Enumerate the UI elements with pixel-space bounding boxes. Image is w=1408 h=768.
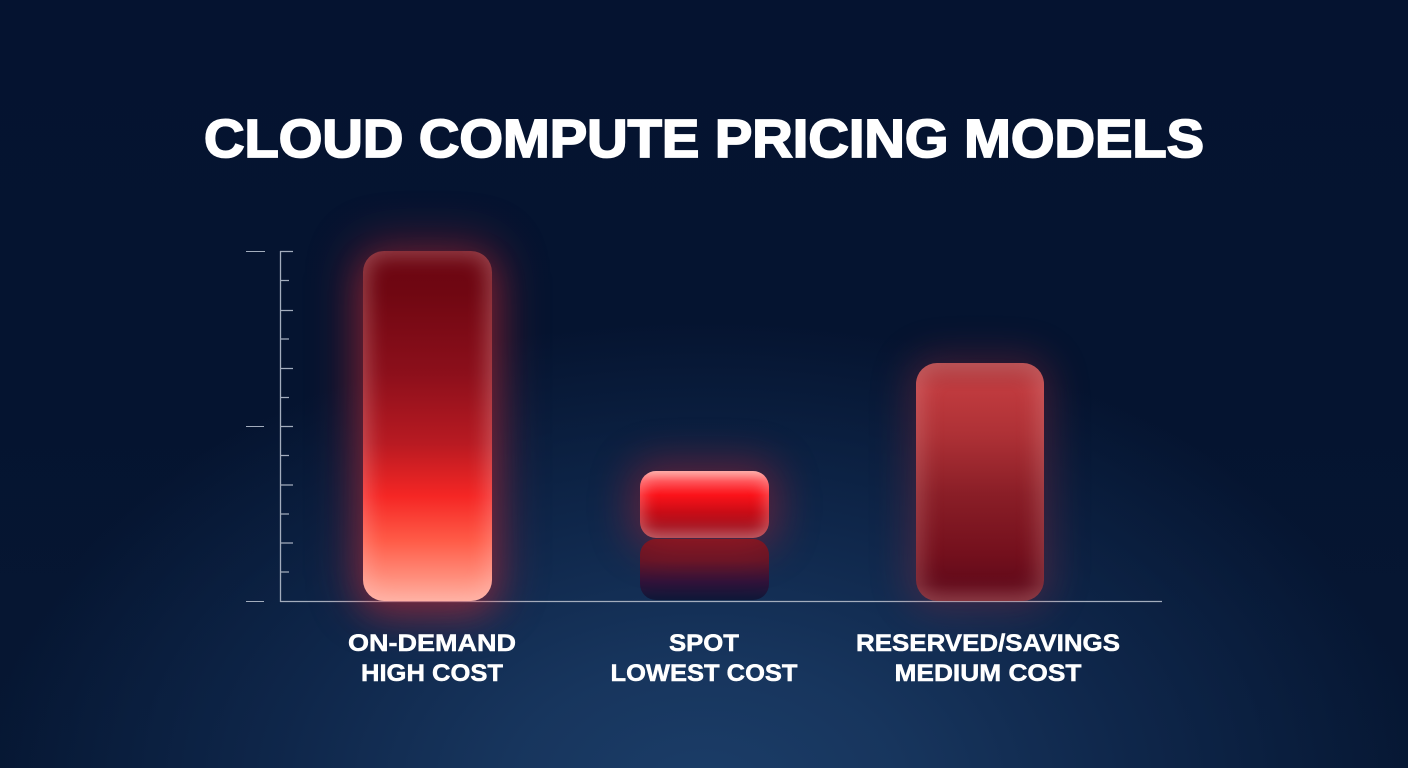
label: on-demand high cost: ON-DEMAND: [348, 630, 516, 657]
label: spot lowest cost: LOWEST COST: [610, 660, 798, 687]
title: CLOUD COMPUTE PRICING MODELS: [204, 109, 1204, 169]
bar: spot reflection: [640, 539, 769, 600]
label: reserved/savings medium cost: MEDIUM COST: [894, 660, 1082, 687]
bar: on-demand high cost: [363, 251, 492, 601]
label: reserved/savings medium cost: RESERVED/SAVINGS: [856, 630, 1120, 657]
bar: spot lowest cost: [640, 471, 769, 538]
label: on-demand high cost: HIGH COST: [361, 660, 503, 687]
bar: reserved/savings medium cost: [916, 363, 1044, 601]
label: spot lowest cost: SPOT: [669, 630, 739, 657]
